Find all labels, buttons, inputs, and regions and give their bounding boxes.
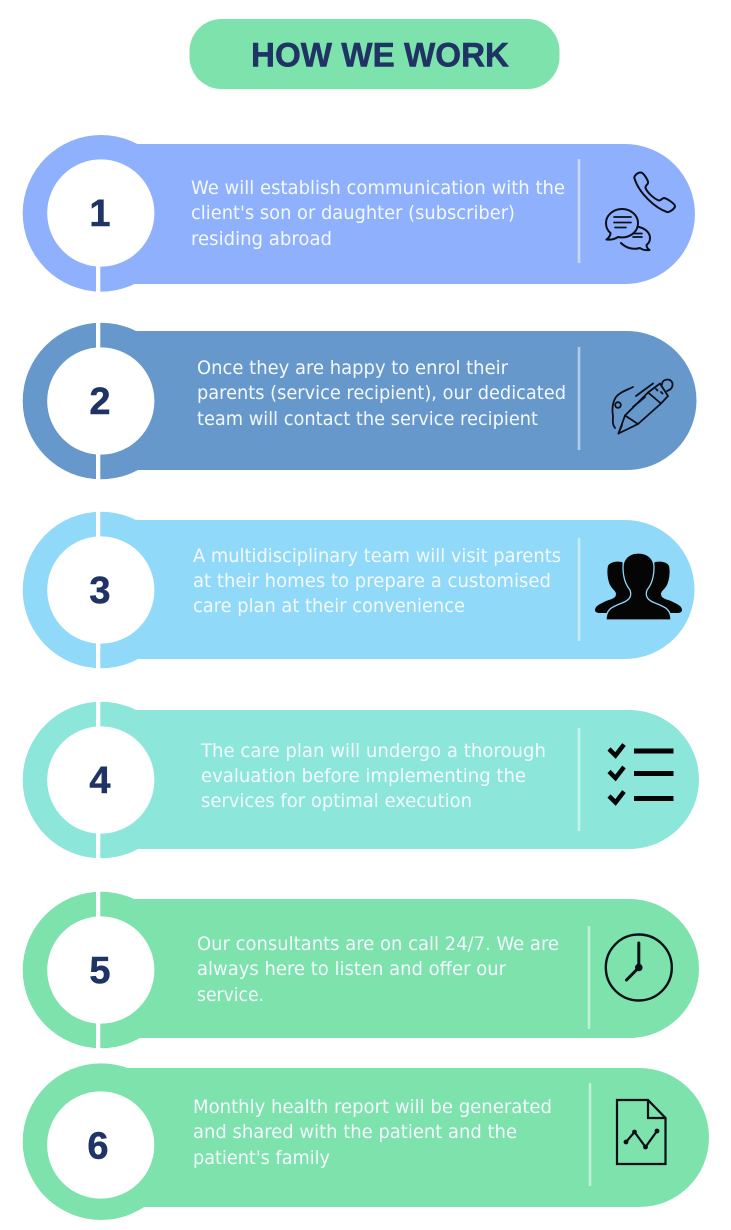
step 6 text: patient's family <box>193 1147 330 1169</box>
step 2 text: parents (service recipient), our dedicated <box>197 382 566 404</box>
panel: step 4 <box>23 699 699 861</box>
step 2 text: Once they are happy to enrol their <box>197 357 508 379</box>
icon: checklist <box>609 744 674 802</box>
panel: step 3 <box>23 509 695 671</box>
step 2 text: team will contact the service recipient <box>197 408 538 430</box>
step number 5: 5 <box>89 950 111 992</box>
panel: step 6 <box>23 1063 709 1220</box>
step number 6: 6 <box>87 1126 109 1168</box>
panel: step 5 <box>23 889 699 1051</box>
step 3 text <box>193 545 561 617</box>
step 6 text: and shared with the patient and the <box>193 1121 517 1143</box>
step 6 text: Monthly health report will be generated <box>193 1096 552 1118</box>
step 3 text: at their homes to prepare a customised <box>193 570 551 592</box>
step 3 text: care plan at their convenience <box>193 595 465 617</box>
step number 3: 3 <box>89 570 111 612</box>
title: HOW WE WORK <box>251 36 509 74</box>
panel: step 1 <box>23 135 695 294</box>
step 4 text: The care plan will undergo a thorough <box>200 740 546 762</box>
step number 2: 2 <box>89 381 111 423</box>
step 1 text: client's son or daughter (subscriber) <box>191 202 515 224</box>
icon: phone and chat bubbles <box>606 172 675 250</box>
panel: step 2 <box>23 320 696 482</box>
icon: people group <box>595 553 682 620</box>
step 5 text: service. <box>197 984 264 1006</box>
step 3 text: A multidisciplinary team will visit parents <box>193 545 561 567</box>
step 4 text <box>200 740 546 812</box>
step 4 text: services for optimal execution <box>201 790 472 812</box>
icon: report document <box>617 1100 666 1164</box>
step 1 text <box>191 177 565 250</box>
step 5 text: Our consultants are on call 24/7. We are <box>197 933 559 955</box>
step number 4: 4 <box>89 760 111 802</box>
step 5 text: always here to listen and offer our <box>197 958 506 980</box>
step 4 text: evaluation before implementing the <box>201 765 526 787</box>
step number 1: 1 <box>89 193 111 235</box>
step 2 text <box>197 357 566 430</box>
step 5 text <box>197 933 559 1006</box>
icon: pen <box>612 380 673 434</box>
step 1 text: residing abroad <box>191 228 332 250</box>
title <box>190 19 560 89</box>
step 6 text <box>193 1096 552 1169</box>
icon: clock <box>606 934 672 1000</box>
step 1 text: We will establish communication with the <box>191 177 565 199</box>
